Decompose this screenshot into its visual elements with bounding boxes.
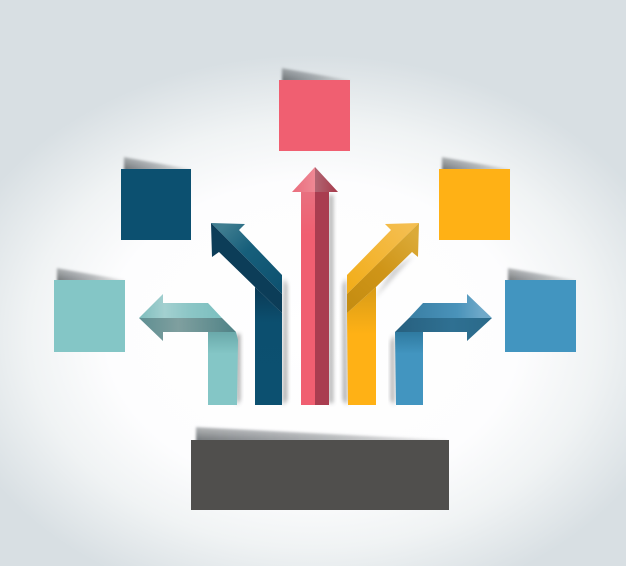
box: blue — [505, 268, 576, 352]
arrow: pink, pointing up — [292, 167, 338, 405]
arrow: yellow, pointing up-right — [343, 223, 419, 405]
arrow: navy, pointing up-left — [211, 223, 287, 405]
base block: dark grey — [191, 427, 449, 510]
box: yellow — [439, 157, 510, 240]
arrow: teal, pointing left — [139, 294, 240, 405]
box: teal — [54, 268, 125, 352]
arrow: blue, pointing right — [391, 294, 492, 405]
box: navy — [121, 157, 191, 240]
box: pink — [279, 68, 350, 151]
